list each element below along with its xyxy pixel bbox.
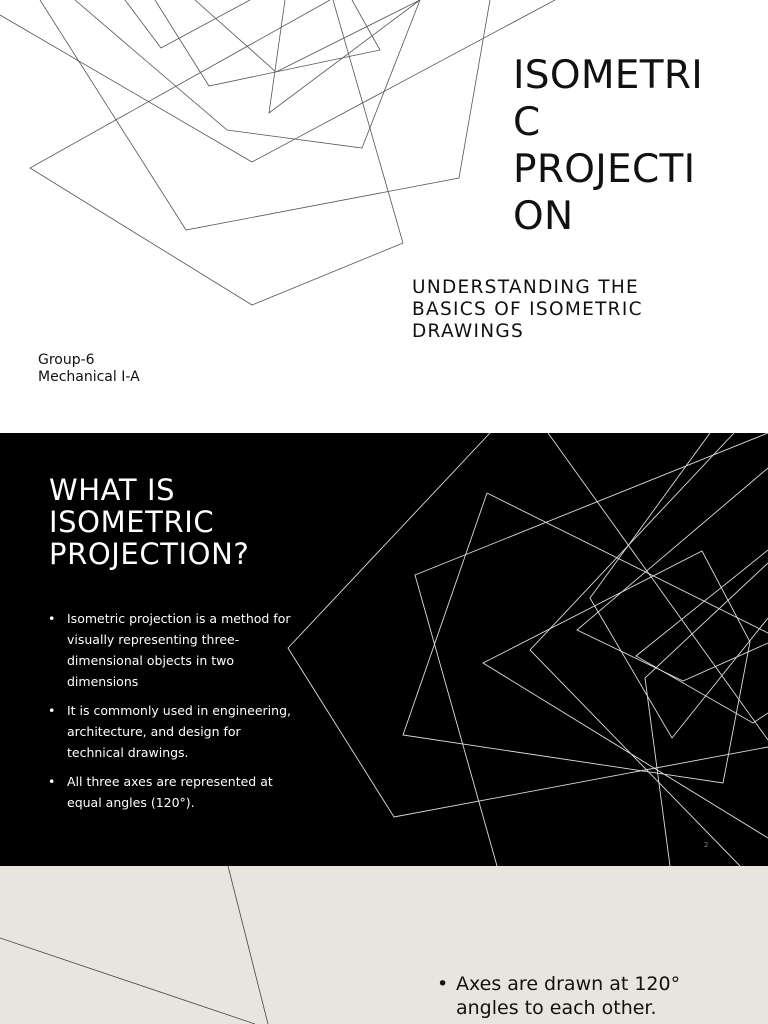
line art: title	[0, 0, 556, 306]
subtitle: BASICS OF ISOMETRIC	[412, 299, 643, 320]
title	[513, 53, 703, 239]
line art: beige	[0, 866, 268, 1024]
bullet list: All three axes are represented at equal angles (120°).	[67, 774, 273, 810]
slide 2: what is isometric projection	[0, 433, 768, 866]
page number: 2	[704, 841, 708, 849]
authors	[38, 352, 140, 385]
bullet list: •	[48, 703, 55, 718]
heading: WHAT IS	[49, 473, 175, 507]
subtitle	[412, 277, 643, 342]
bullet text: •	[437, 973, 448, 995]
bullet text	[437, 973, 680, 1019]
slide 3: axes	[0, 866, 768, 1024]
bullet list: It is commonly used in engineering, architecture, and design for technical drawings.	[67, 703, 291, 760]
bullet text: angles to each other.	[456, 997, 657, 1019]
bullet list: Isometric projection is a method for visually representing three-dimensional objects in two dimensions	[67, 611, 290, 689]
title: ON	[513, 194, 573, 239]
title: ISOMETRI	[513, 53, 703, 98]
bullet list: •	[48, 774, 55, 789]
slide 1: title slide	[0, 0, 768, 433]
subtitle: UNDERSTANDING THE	[412, 277, 639, 298]
title: PROJECTI	[513, 147, 695, 192]
bullet text: Axes are drawn at 120°	[456, 973, 680, 995]
authors: Group-6	[38, 352, 95, 368]
bullet list	[48, 611, 291, 810]
authors: Mechanical I-A	[38, 369, 140, 385]
heading: ISOMETRIC	[49, 505, 214, 539]
subtitle: DRAWINGS	[412, 321, 524, 342]
heading	[49, 473, 249, 571]
heading: PROJECTION?	[49, 537, 249, 571]
title: C	[513, 100, 541, 145]
line art: dark	[288, 433, 768, 866]
bullet list: •	[48, 611, 55, 626]
